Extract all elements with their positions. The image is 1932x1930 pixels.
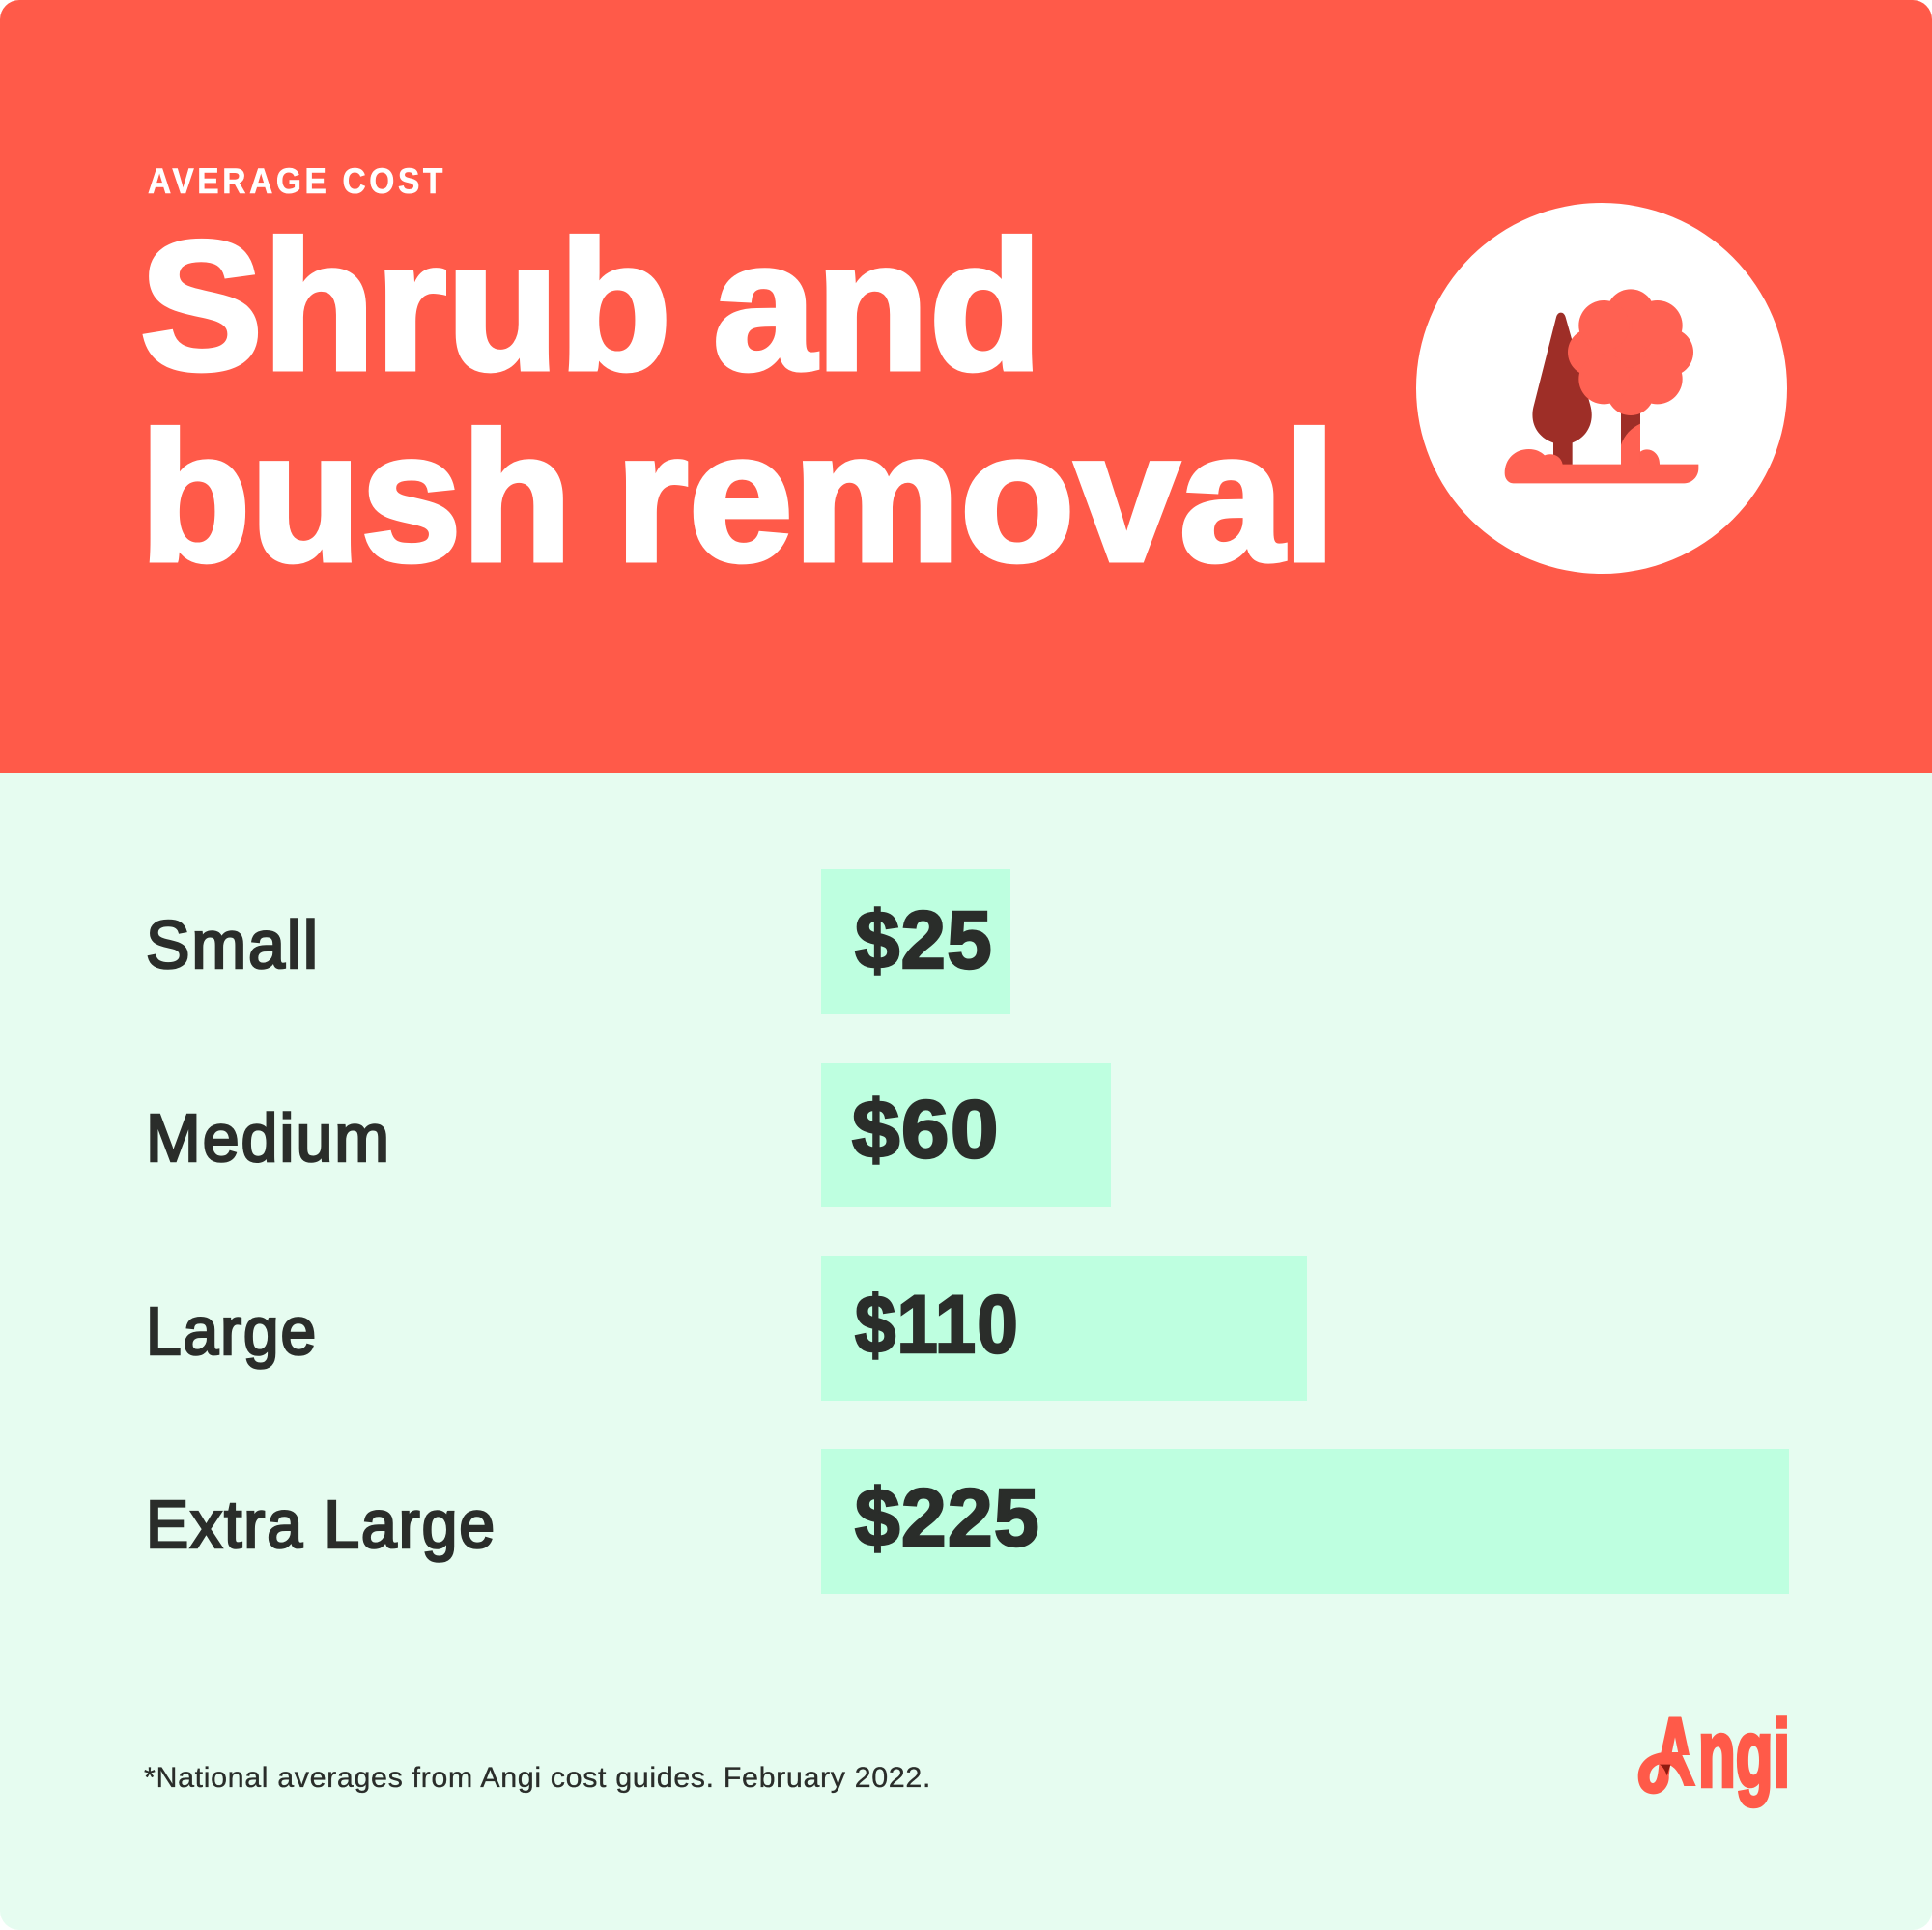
panel: mint chart background (0, 773, 1932, 1930)
title: and (713, 204, 1042, 409)
title (143, 234, 1325, 564)
row: Extra Large (146, 1449, 1789, 1594)
row: Extra Large: $225 (855, 1472, 1040, 1563)
footnote: *National averages from Angi cost guides. February 2022. (144, 1762, 931, 1794)
row: Extra Large: Extra Large (146, 1487, 497, 1562)
row: Medium: $60 (852, 1084, 1000, 1175)
title: Shrub (140, 204, 671, 409)
logo: Angi (1638, 1715, 1787, 1808)
icon: round tree crown (1568, 289, 1693, 415)
logo: Angi: ngi (1698, 1700, 1790, 1806)
icon: white circle with trees (1416, 203, 1787, 574)
logo: swash loop (1638, 1752, 1696, 1794)
logo: Angi: A (1654, 1699, 1696, 1807)
row: Medium: Medium (146, 1100, 391, 1176)
icon: dark cypress tree (1532, 313, 1592, 466)
row: Large (146, 1256, 1307, 1401)
title: bush (140, 395, 572, 600)
logo: swash shadow (1660, 1765, 1670, 1775)
row: Small: $25 (855, 894, 993, 985)
title: removal (615, 395, 1336, 600)
row: Medium (146, 1063, 1111, 1207)
icon: ground and bushes (1505, 449, 1698, 483)
row: Small: Small (146, 907, 320, 982)
row: Small (146, 869, 1010, 1014)
eyebrow label: AVERAGE COST (148, 161, 446, 201)
row: Large: Large (146, 1293, 318, 1369)
panel: red header (0, 0, 1932, 773)
icon: right tree trunk (1621, 409, 1640, 466)
row: Large: $110 (855, 1279, 1019, 1370)
